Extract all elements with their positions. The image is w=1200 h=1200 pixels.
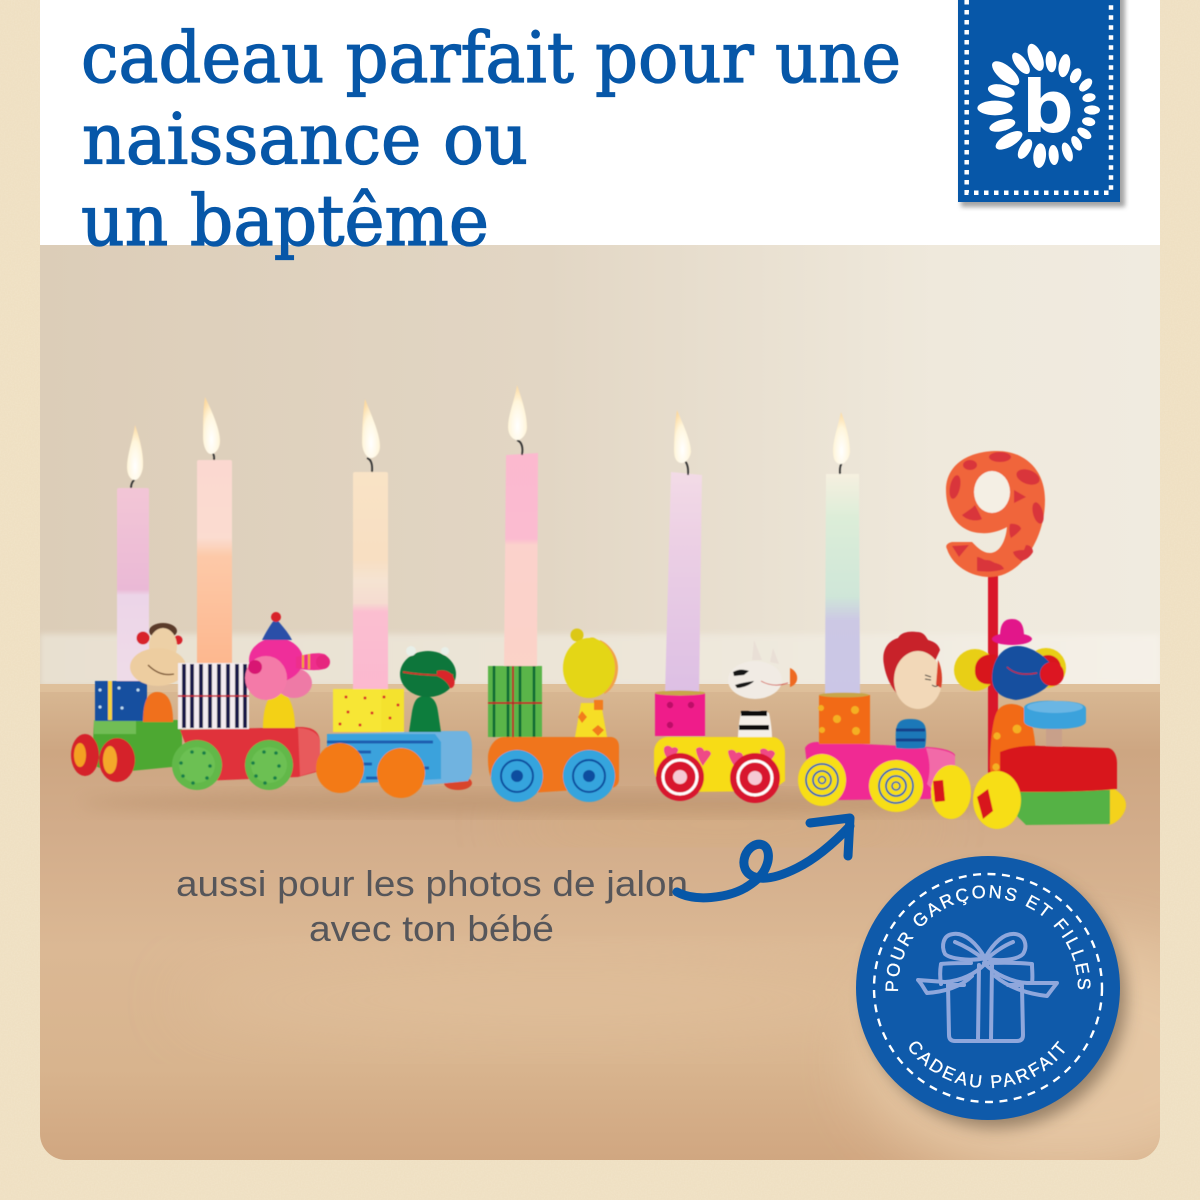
candle train — [71, 385, 1126, 829]
brand logo tag — [958, 0, 1125, 207]
caption — [176, 863, 688, 949]
title: naissance ou — [82, 98, 528, 180]
wall background — [40, 245, 1160, 690]
candle 1 — [117, 425, 149, 683]
caption: aussi pour les photos de jalon — [176, 863, 688, 904]
wagon 1: monkey — [71, 623, 186, 782]
wagon 3: frog — [316, 646, 472, 798]
wagon 6: lion — [798, 632, 955, 812]
caption: avec ton bébé — [309, 908, 554, 949]
candle 3 — [353, 399, 388, 690]
title: cadeau parfait pour une — [81, 17, 901, 99]
baseboard — [40, 634, 1160, 686]
logo flower — [977, 42, 1100, 169]
locomotive with mouse — [931, 619, 1126, 829]
candle 4 — [504, 385, 538, 667]
number nine on a stick — [946, 451, 1046, 775]
title — [81, 17, 901, 262]
wagon 4: bear — [488, 628, 619, 802]
candle 6 — [825, 412, 860, 696]
arrow: curly pointer to train — [677, 818, 850, 898]
wooden floor — [40, 684, 1200, 1180]
icon: gift box — [918, 934, 1057, 1041]
candle 5 — [665, 410, 702, 695]
logo letter b: b — [1022, 65, 1074, 149]
badge text top: POUR GARÇONS ET FILLES — [885, 885, 1091, 991]
badge text bottom: CADEAU PARFAIT — [909, 1040, 1065, 1088]
title: un baptême — [81, 180, 489, 262]
wagon 5: zebra — [654, 640, 797, 803]
wagon 2: elephant — [172, 612, 330, 790]
round badge: perfect gift — [856, 856, 1135, 1137]
white header panel — [40, 0, 1160, 246]
photo: candle train on a wooden floor — [40, 245, 1200, 1180]
candle 2 — [197, 397, 232, 665]
